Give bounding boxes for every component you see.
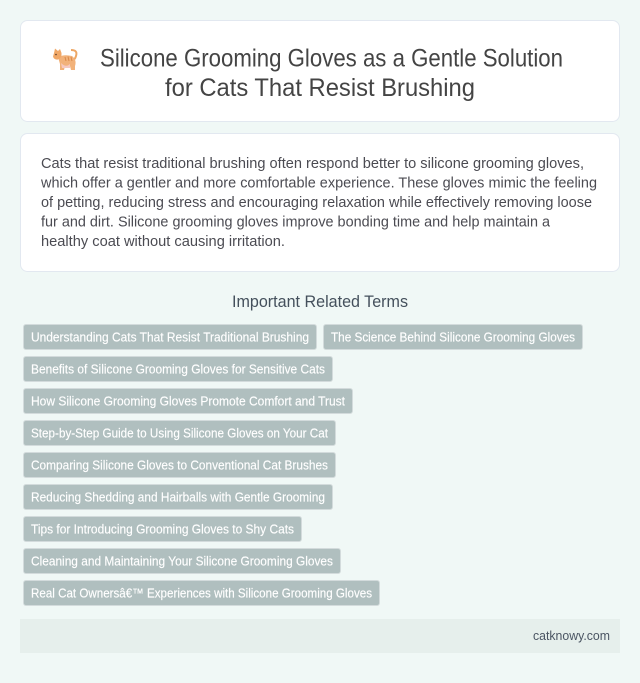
tag: the science: The Science Behind Silicone Grooming Gloves [331,329,575,344]
tag: reducing shedding [24,484,332,510]
tag: reducing shedding: Reducing Shedding and Hairballs with Gentle Grooming [31,489,325,504]
tag: step-by-step [24,420,336,446]
heading: important related terms: Important Related Terms [232,293,408,311]
icon: cat [53,48,76,70]
panel: title card [20,20,620,122]
tag: benefits [24,356,332,382]
tag: comfort and trust [24,388,352,414]
tag: comparing [24,452,336,478]
footer: site name: catknowy.com [533,629,610,643]
text block: description: fur and dirt. Silicone grooming gloves improve bonding time and help maintain a [41,214,551,230]
tag: understanding cats [24,324,316,350]
list: related terms tags [24,324,582,606]
heading: title: Silicone Grooming Gloves as a Gentle Solution [100,44,563,72]
tag: comparing: Comparing Silicone Gloves to Conventional Cat Brushes [31,457,328,472]
text block: description: which offer a gentler and more comfortable experience. These gloves mimic the feeling [40,174,597,192]
tag: the science [324,324,582,350]
heading: title: for Cats That Resist Brushing [165,74,475,102]
footer bar [20,619,620,653]
tag: benefits: Benefits of Silicone Grooming Gloves for Sensitive Cats [31,361,325,376]
tag: cleaning [24,548,340,574]
tag: comfort and trust: How Silicone Grooming Gloves Promote Comfort and Trust [31,393,345,408]
tag: real cat owners [24,580,380,606]
tag: tips: Tips for Introducing Grooming Gloves to Shy Cats [31,521,294,536]
text block: description: Cats that resist traditional brushing often respond better to silicone grooming gloves, [41,155,584,172]
tag: cleaning: Cleaning and Maintaining Your Silicone Grooming Gloves [31,553,333,568]
text block: description: of petting, reducing stress and encouraging relaxation while effectively removing loose [41,194,592,211]
tag: real cat owners: Real Cat Ownersâ€™ Experiences with Silicone Grooming Gloves [31,585,372,600]
panel: description card [20,134,620,272]
tag: understanding cats: Understanding Cats That Resist Traditional Brushing [31,329,309,344]
text block: description [40,155,597,250]
tag: tips [24,516,302,542]
heading: title [100,44,563,102]
text block: description: healthy coat without causing irritation. [41,233,285,250]
tag: step-by-step: Step-by-Step Guide to Using Silicone Gloves on Your Cat [31,425,328,440]
